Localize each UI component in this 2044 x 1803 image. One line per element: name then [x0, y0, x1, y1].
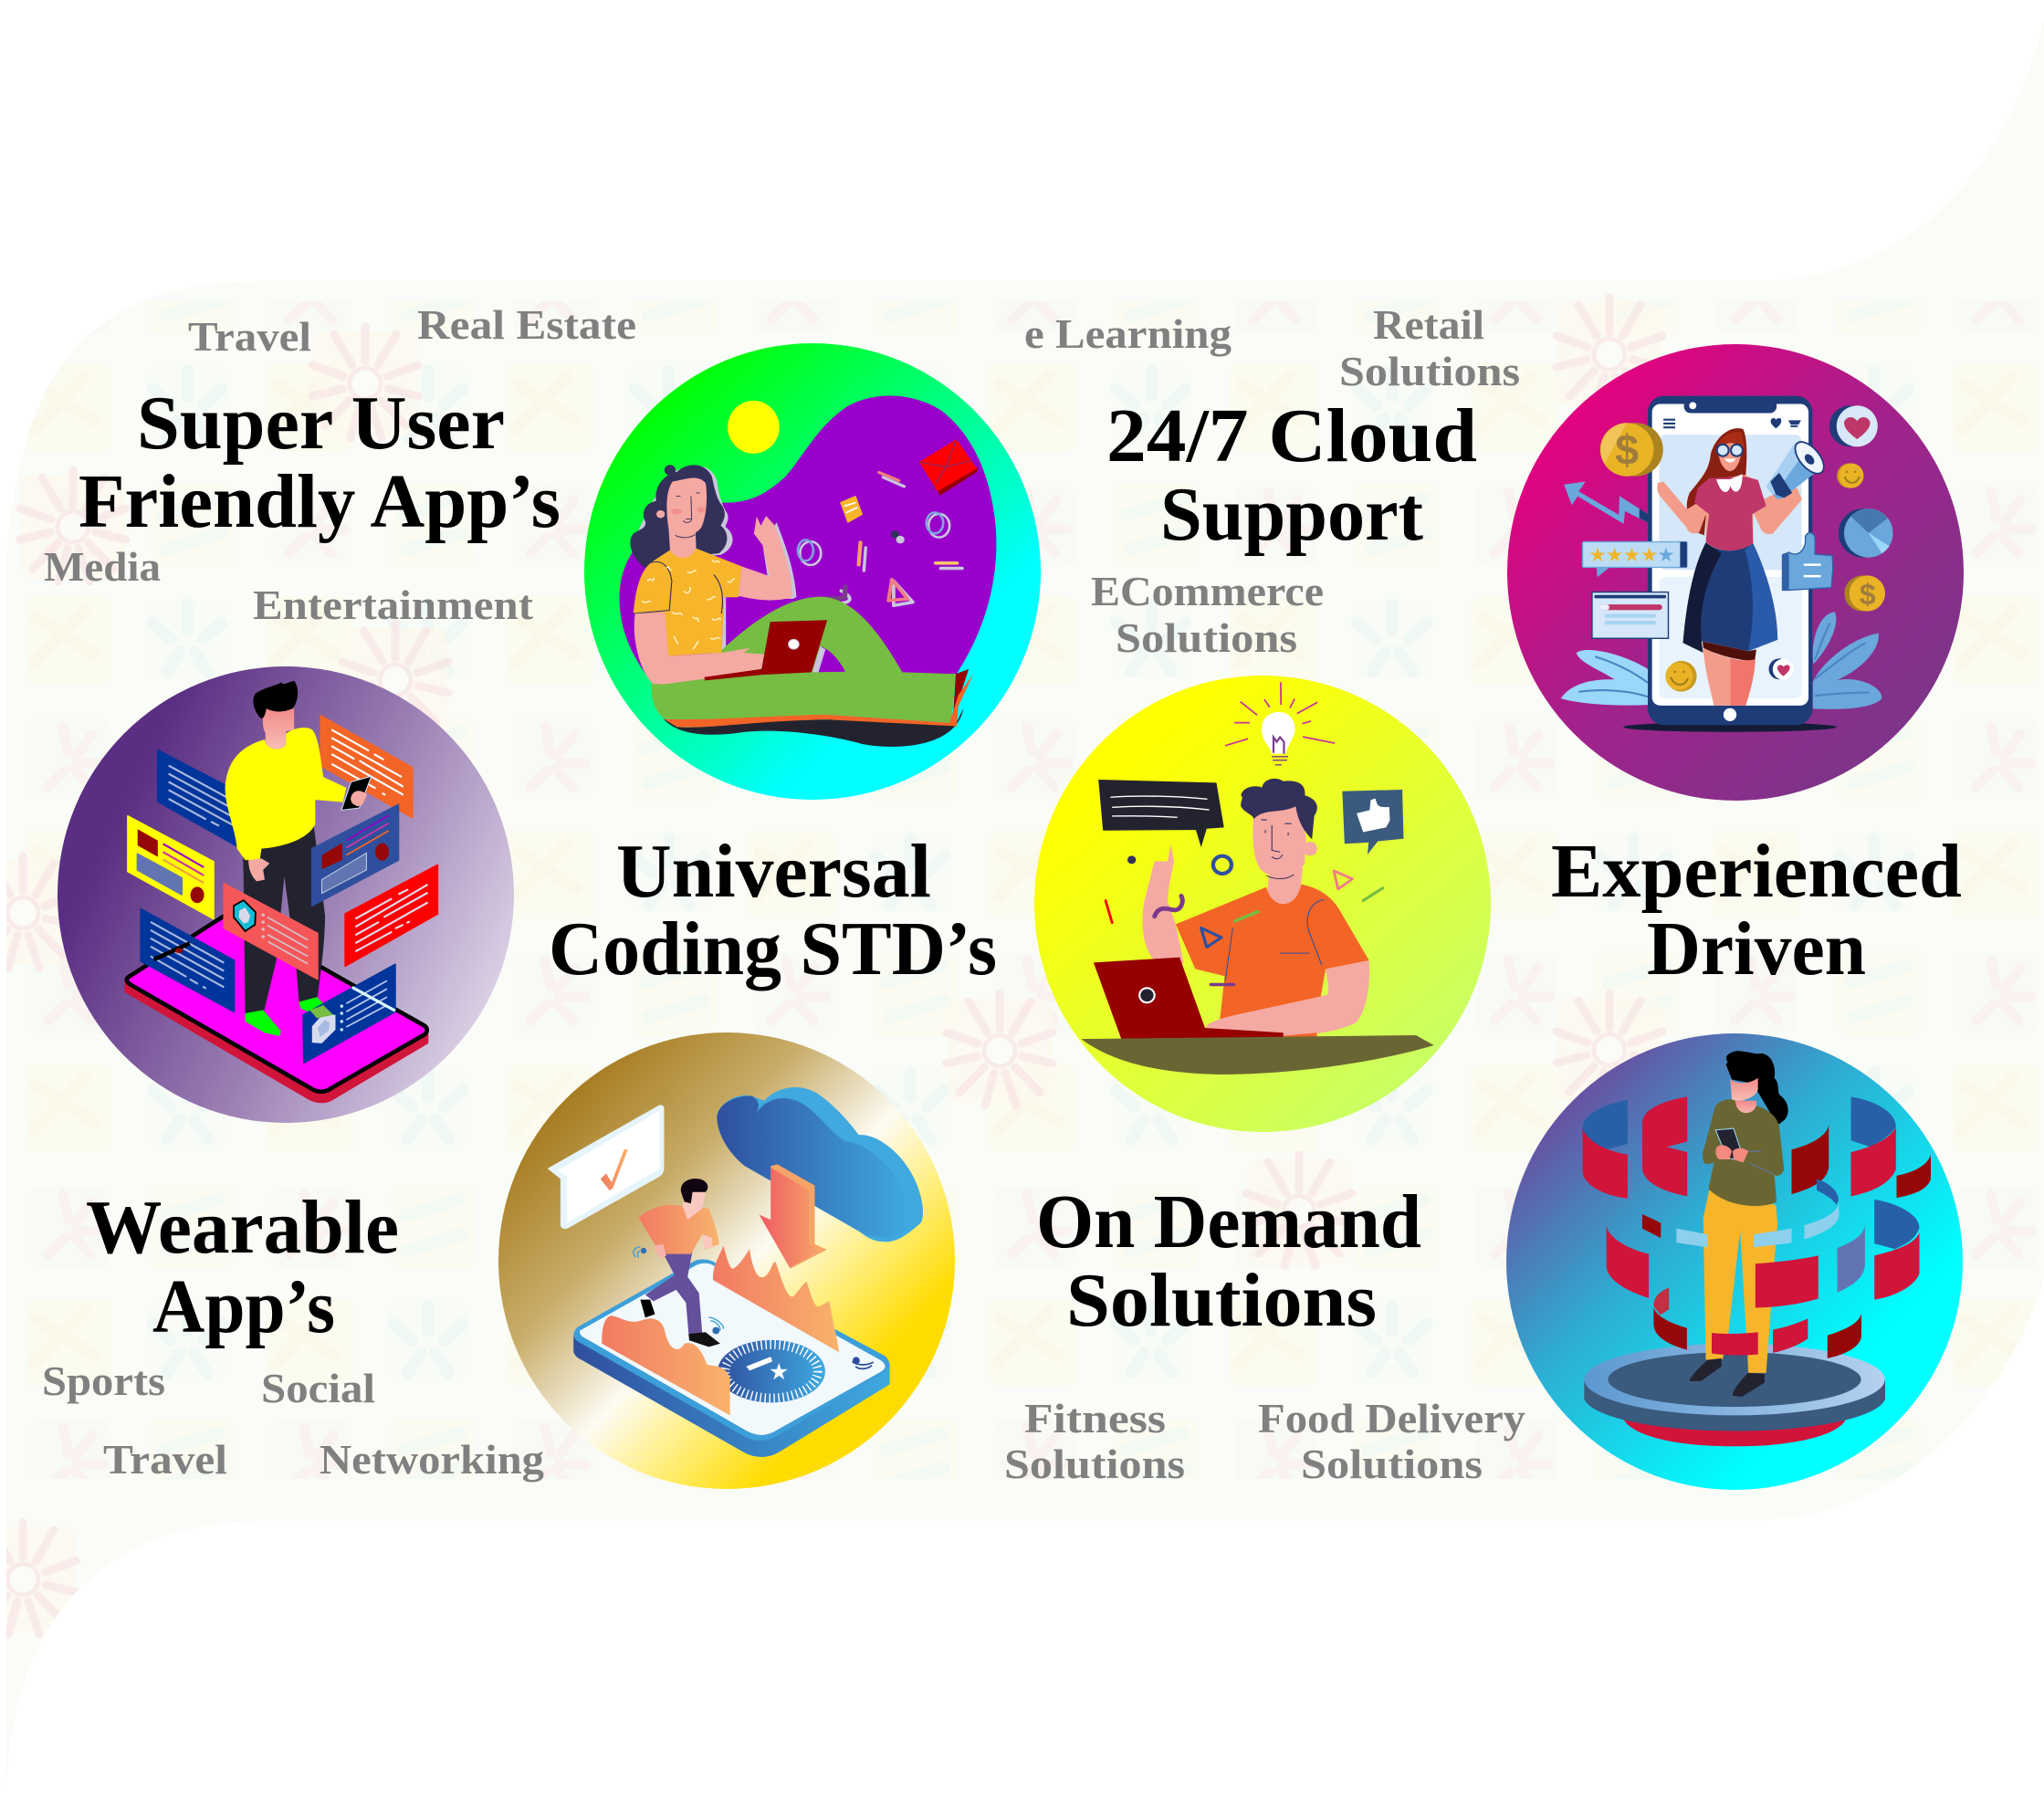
section: Wearable App's: App’s — [152, 1264, 335, 1349]
section: Super User Friendly App's: Friendly App’s — [79, 459, 561, 544]
envelope — [919, 439, 978, 496]
section: On Demand Solutions: Fitness — [1024, 1395, 1166, 1441]
section: Super User Friendly App's: Entertainment — [253, 582, 534, 628]
ribbons back — [1583, 1096, 1931, 1358]
man — [225, 681, 372, 1036]
man — [1142, 779, 1369, 1037]
flame charts — [602, 1246, 839, 1415]
section: 24/7 Cloud Support: Solutions — [1339, 348, 1520, 394]
section: On Demand Solutions: Solutions — [1066, 1258, 1377, 1343]
background band — [6, 294, 2040, 1638]
runner — [634, 1179, 723, 1347]
back panels — [128, 716, 413, 918]
laptop — [704, 620, 827, 680]
speech bubble — [1098, 780, 1224, 847]
coin, arrow, rating and browser cards: $ — [1615, 426, 1639, 474]
like bubble — [1342, 790, 1403, 854]
section: Wearable App's: Networking — [320, 1436, 544, 1483]
laptop — [1094, 958, 1284, 1041]
right icons: $ — [1860, 578, 1876, 611]
section: Wearable App's: Travel — [103, 1436, 227, 1483]
section: 24/7 Cloud Support: Retail — [1373, 301, 1484, 348]
heading: Experienced Driven — [1551, 829, 1962, 991]
front panels — [141, 804, 437, 1063]
shirt and arm — [634, 549, 766, 685]
section: Wearable App's: Wearable — [86, 1185, 399, 1270]
coin, arrow, rating and browser cards — [1564, 423, 1687, 638]
section: 24/7 Cloud Support: Support — [1160, 472, 1423, 557]
illustration: woman on cushion with laptop — [584, 343, 1041, 800]
section: Super User Friendly App's: Super User — [137, 381, 505, 466]
heading: Universal Coding STD's — [549, 829, 997, 991]
heading: Experienced Driven: Experienced — [1551, 829, 1962, 914]
section: 24/7 Cloud Support: Solutions — [1116, 614, 1297, 661]
pedestal — [1584, 1344, 1885, 1446]
notification card — [548, 1105, 664, 1229]
section: On Demand Solutions: Solutions — [1301, 1441, 1483, 1487]
heading: Universal Coding STD's: Universal — [616, 829, 931, 914]
coin, arrow, rating and browser cards: ★ — [1640, 544, 1658, 567]
section: 24/7 Cloud Support: 24/7 Cloud — [1106, 393, 1477, 478]
section: On Demand Solutions — [1004, 1179, 1525, 1487]
section: Wearable App's — [42, 1185, 544, 1483]
doodles — [1106, 855, 1383, 923]
cloud — [717, 1087, 923, 1242]
phone platform — [124, 914, 428, 1103]
green legs and cushion — [652, 597, 973, 747]
download arrow — [760, 1164, 827, 1269]
heading: Experienced Driven: Driven — [1647, 907, 1866, 991]
section: Super User Friendly App's — [44, 301, 636, 628]
illustration: runner on wearable device under cloud — [498, 1033, 955, 1489]
desk — [1081, 1035, 1434, 1074]
section: 24/7 Cloud Support — [1024, 301, 1520, 661]
coin, arrow, rating and browser cards: ★ — [1606, 544, 1623, 567]
illustration: man on phone platform with info panels — [58, 666, 514, 1123]
section: On Demand Solutions: Solutions — [1004, 1441, 1185, 1487]
illustration: woman inside ribbon cylinder on pedestal — [1506, 1033, 1963, 1490]
illustration: woman on smartphone with social icons — [1507, 344, 1964, 801]
heading: Universal Coding STD's: Coding STD’s — [549, 907, 997, 991]
coin, arrow, rating and browser cards: ★ — [1588, 544, 1607, 567]
device: ★ — [769, 1358, 789, 1385]
plants — [1561, 612, 1882, 709]
illustration: man at laptop with idea bulb — [1034, 676, 1491, 1132]
purple blob — [619, 396, 996, 684]
right icons — [1782, 405, 1893, 612]
sun — [728, 401, 780, 454]
light bulb — [1225, 682, 1335, 765]
device — [573, 1259, 890, 1457]
woman — [630, 465, 796, 653]
phone — [1623, 396, 1837, 732]
coin, arrow, rating and browser cards: ★ — [1657, 544, 1675, 567]
ribbons front — [1676, 1201, 1839, 1356]
woman with megaphone — [1657, 428, 1829, 706]
section: 24/7 Cloud Support: e Learning — [1024, 310, 1232, 357]
section: Super User Friendly App's: Real Estate — [417, 301, 636, 348]
section: Wearable App's: Sports — [42, 1357, 165, 1404]
floating doodles — [798, 472, 962, 605]
section: On Demand Solutions: On Demand — [1036, 1179, 1421, 1264]
section: 24/7 Cloud Support: ECommerce — [1091, 568, 1324, 614]
section: On Demand Solutions: Food Delivery — [1258, 1395, 1525, 1441]
section: Wearable App's: Social — [261, 1365, 375, 1411]
section: Super User Friendly App's: Media — [44, 543, 161, 590]
woman — [1690, 1051, 1788, 1397]
section: Super User Friendly App's: Travel — [188, 313, 311, 360]
coin, arrow, rating and browser cards: ★ — [1623, 544, 1640, 567]
